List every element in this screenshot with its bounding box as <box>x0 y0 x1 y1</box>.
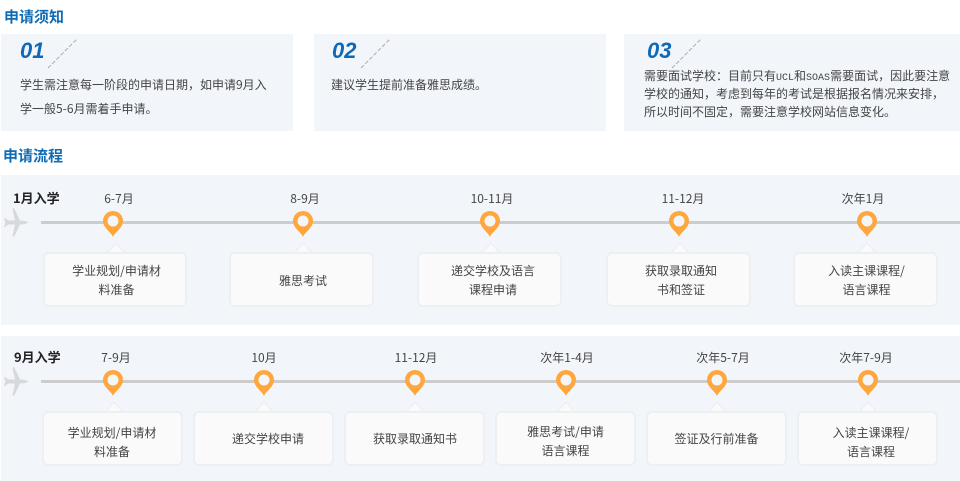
card: 签证及行前准备: 签证及行前准备 <box>674 430 758 447</box>
notice 01 text: 学一般5-6月需着手申请。 <box>20 100 158 117</box>
card: 入读主课课程/语言课程: 语言课程 <box>847 442 895 460</box>
notice 01 text <box>20 76 267 117</box>
dashed diagonals beside numbers <box>48 40 700 68</box>
panel: notice 01 <box>1 34 293 131</box>
card: 学业规划/申请材料准备: 学业规划/申请材 <box>72 262 161 279</box>
card: 雅思考试: 雅思考试 <box>279 272 327 288</box>
card: 获取录取通知书 <box>344 411 485 466</box>
icon: plane <box>4 367 28 396</box>
notice 03 text: 需要面试学校：目前只有UCL和SOAS需要面试，因此要注意 <box>644 67 950 84</box>
card: 获取录取通知书和签证: 获取录取通知 <box>645 262 717 279</box>
card: 学业规划/申请材料准备 <box>42 411 183 466</box>
number 01: 01 <box>20 38 44 63</box>
label: 1月入学: 1月入学 <box>13 188 60 207</box>
card: 学业规划/申请材料准备: 料准备 <box>94 442 130 460</box>
icon: pin 6 <box>858 370 878 396</box>
date: 次年5-7月: 次年5-7月 <box>696 349 750 366</box>
icon: pin 3 <box>480 211 500 237</box>
icon: pin 4 <box>556 370 576 396</box>
card: 递交学校申请 <box>193 411 334 466</box>
notice 02 text: 建议学生提前准备雅思成绩。 <box>331 76 487 93</box>
card: 雅思考试/申请语言课程: 雅思考试/申请 <box>527 423 604 440</box>
notice 01 text: 学生需注意每一阶段的申请日期，如申请9月入 <box>20 76 267 93</box>
card: 获取录取通知书和签证 <box>606 252 751 307</box>
number 03: 03 <box>647 38 671 63</box>
icon: pin 3 <box>405 370 425 396</box>
timeline line <box>41 380 960 383</box>
number 02: 02 <box>332 38 356 63</box>
date: 11-12月: 11-12月 <box>395 349 437 366</box>
card: 签证及行前准备 <box>646 411 787 466</box>
date: 次年7-9月: 次年7-9月 <box>839 349 893 366</box>
panel: January intake timeline <box>1 175 960 325</box>
card: 入读主课课程/语言课程 <box>793 252 938 307</box>
icon: pin 1 <box>103 211 123 237</box>
label: 9月入学: 9月入学 <box>14 347 61 366</box>
card: 学业规划/申请材料准备: 学业规划/申请材 <box>68 424 156 440</box>
card: 递交学校及语言课程申请 <box>417 252 562 307</box>
card: 学业规划/申请材料准备: 料准备 <box>98 281 134 298</box>
heading: 申请流程: 申请流程 <box>3 145 63 166</box>
card: 入读主课课程/语言课程 <box>797 411 938 466</box>
date: 6-7月: 6-7月 <box>104 190 134 207</box>
card: 入读主课课程/语言课程: 语言课程 <box>842 281 890 298</box>
heading: 申请须知: 申请须知 <box>4 6 64 27</box>
icon: pin 4 <box>669 211 689 237</box>
card pointers <box>1 396 960 412</box>
notice 03 text <box>644 67 950 120</box>
card: 递交学校及语言课程申请: 课程申请 <box>469 281 517 298</box>
card: 雅思考试/申请语言课程 <box>495 411 636 466</box>
date: 次年1月: 次年1月 <box>842 190 884 207</box>
date: 次年1-4月: 次年1-4月 <box>540 349 594 366</box>
date: 8-9月: 8-9月 <box>290 190 320 207</box>
date: 10-11月: 10-11月 <box>471 190 513 207</box>
panel: notice 02 <box>314 34 606 131</box>
date: 10月: 10月 <box>251 349 277 366</box>
card pointers <box>1 237 960 253</box>
card: 递交学校申请: 递交学校申请 <box>232 430 304 447</box>
notice 03 text: 学校的通知，考虑到每年的考试是根据报名情况来安排， <box>644 85 944 102</box>
card: 入读主课课程/语言课程: 入读主课课程/ <box>833 424 909 440</box>
notice 03 text: 所以时间不固定，需要注意学校网站信息变化。 <box>644 103 896 120</box>
panel: September intake timeline <box>1 336 960 481</box>
card: 学业规划/申请材料准备 <box>43 252 187 307</box>
icon: pin 2 <box>254 370 274 396</box>
icon: plane <box>4 208 28 237</box>
icon: pin 5 <box>707 370 727 396</box>
date: 11-12月: 11-12月 <box>662 190 704 207</box>
timeline line <box>41 221 960 224</box>
card: 入读主课课程/语言课程: 入读主课课程/ <box>828 262 905 279</box>
panel: notice 03 <box>624 34 960 131</box>
card: 获取录取通知书和签证: 书和签证 <box>657 281 705 298</box>
icon: pin 2 <box>293 211 313 237</box>
card: 雅思考试/申请语言课程: 语言课程 <box>541 442 590 459</box>
card: 获取录取通知书: 获取录取通知书 <box>373 430 457 447</box>
date: 7-9月: 7-9月 <box>101 349 131 366</box>
card: 雅思考试 <box>229 252 374 307</box>
icon: pin 5 <box>857 211 877 237</box>
card: 递交学校及语言课程申请: 递交学校及语言 <box>451 262 535 279</box>
icon: pin 1 <box>103 370 123 396</box>
